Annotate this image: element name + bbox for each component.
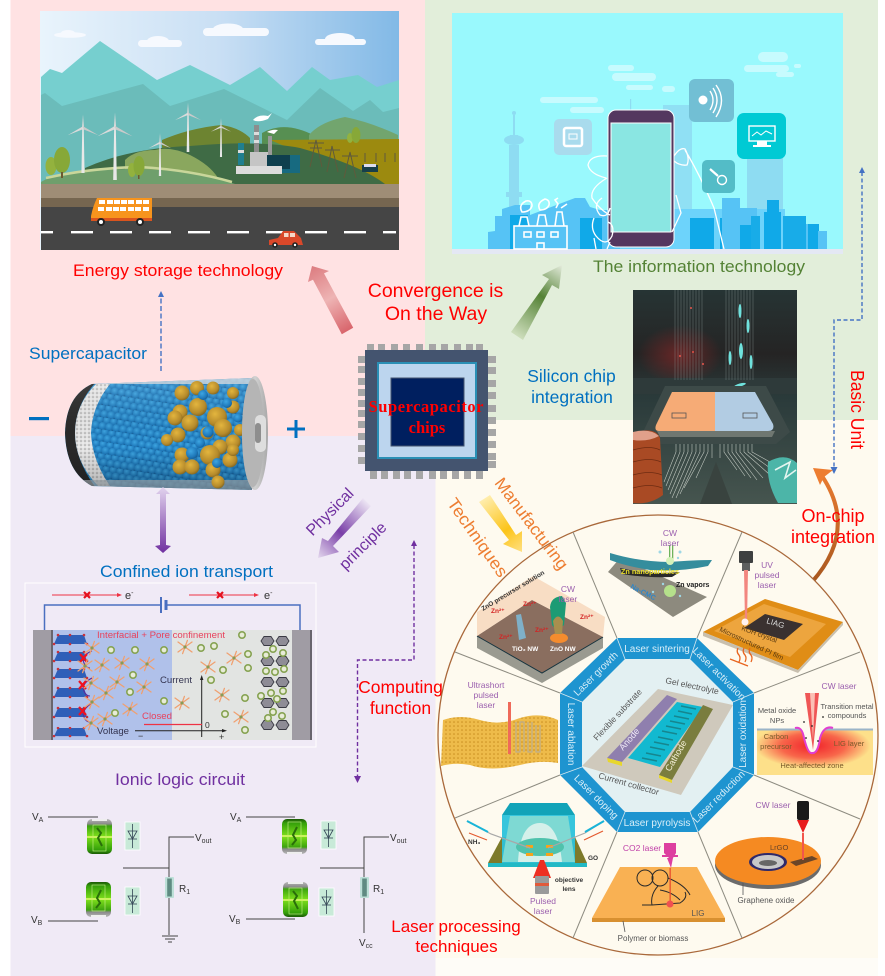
scene: laser activation: laser: [758, 580, 776, 590]
circuit: left logic gate: A: [39, 817, 44, 824]
circuit: right logic gate: B: [236, 919, 241, 926]
electron flow blocked: [52, 590, 273, 602]
icon: monitor: [737, 113, 786, 159]
scene: laser activation: [703, 551, 843, 673]
chip body: [643, 386, 790, 444]
label: manufacturing: Manufacturing: [491, 474, 572, 573]
scene: laser sintering: Na-CMC: [629, 584, 657, 602]
trees: [46, 127, 360, 179]
heading: ionic logic circuit: Ionic logic circuit: [115, 770, 245, 789]
label: silicon chip integration: integration: [531, 387, 613, 407]
scene: laser doping: objective: [555, 877, 583, 884]
icon: plus terminal: [287, 420, 305, 438]
heading: energy storage technology: Energy storage technology: [73, 261, 284, 280]
scene: laser doping: [467, 803, 604, 916]
circuit: right logic gate: A: [237, 817, 242, 824]
octagon ring of laser techniques: Laser oxidation: [738, 700, 749, 768]
scene: laser oxidation: compounds: [828, 711, 867, 720]
scene: laser sintering: [608, 528, 712, 617]
scene: laser reduction: CW laser: [756, 800, 791, 810]
scene: laser growth: TiO₂ NW: [512, 646, 539, 653]
octagon ring of laser techniques: Laser pyrolysis: [624, 818, 690, 829]
scene: laser growth: Zn²⁺: [491, 608, 505, 615]
scene: laser doping: NH₃: [468, 839, 480, 846]
circuit: right logic gate: 1: [380, 889, 384, 896]
circuit: left logic gate: B: [38, 920, 43, 927]
panel: silicon chip photo: [633, 290, 797, 504]
scene: laser oxidation: Heat-affected zone: [780, 761, 844, 770]
icon: chip: [554, 119, 592, 155]
car: [269, 231, 303, 248]
heading: laser processing techniques: techniques: [415, 937, 498, 956]
icon: magnifier: [702, 160, 735, 193]
central flexible device: [582, 675, 733, 797]
label: on-chip integration: integration: [791, 527, 875, 547]
scene: laser ablation: laser: [477, 700, 495, 710]
central flexible device: Current collector: [597, 770, 660, 797]
teal cylinder: [768, 457, 797, 503]
electron flow blocked: e: [264, 590, 270, 602]
current-voltage plot: Closed: [142, 711, 172, 722]
scene: laser pyrolysis: Polymer or biomass: [618, 934, 688, 943]
scene: laser ablation: pulsed: [473, 690, 499, 700]
scene: laser oxidation: Transition metal: [820, 702, 874, 711]
scene: laser oxidation: [757, 681, 874, 775]
label: silicon chip integration: Silicon chip: [527, 366, 616, 386]
arrow: manufacturing techniques: [479, 495, 522, 552]
scene: laser sintering: CW: [663, 528, 677, 538]
circuit: left logic gate: [31, 812, 211, 942]
circuit: right logic gate: V: [229, 914, 236, 925]
circuit: left logic gate: out: [202, 838, 211, 845]
label: computing function: function: [370, 698, 431, 718]
central flexible device: Anode: [617, 726, 642, 752]
red cylinder: [633, 430, 663, 503]
scene: laser activation: LIAG: [765, 616, 785, 630]
carbon electrode: [258, 636, 289, 730]
hand outline: [588, 149, 724, 249]
scene: laser oxidation: LIG layer: [834, 739, 865, 748]
circuit: right logic gate: cc: [366, 943, 373, 950]
circuit: right logic gate: out: [397, 838, 406, 845]
scene: laser growth: ZnO NW: [550, 646, 576, 653]
scene: laser doping: Pulsed: [530, 896, 556, 906]
scene: laser activation: Microstructured PI film: [718, 626, 784, 662]
layered electrode: [53, 634, 92, 737]
scene: laser growth: Zn²⁺: [523, 601, 537, 608]
scene: laser doping: GO: [588, 855, 598, 862]
current-voltage plot: Current: [160, 675, 192, 686]
arrow: to information technology: [511, 265, 562, 340]
clouds: [540, 52, 801, 113]
chip pins: [358, 344, 496, 479]
heading: interfacial plus pore confinement: Interfacial + Pore confinement: [97, 630, 226, 640]
scene: laser activation: KOH crystal: [740, 625, 778, 645]
scene: laser ablation: [441, 680, 558, 768]
current-voltage plot: 0: [205, 720, 210, 730]
octagon ring of laser techniques: Laser ablation: [565, 703, 576, 765]
arrow: to energy storage: [308, 266, 353, 334]
scene: laser pyrolysis: LIG: [692, 909, 704, 918]
city buildings: [488, 198, 827, 249]
heading: convergence is on the way: Convergence is: [368, 280, 503, 302]
supercapacitor cell illustration: [60, 375, 268, 495]
label: computing function: Computing: [358, 677, 443, 697]
panel: laser processing wheel: [438, 515, 878, 955]
octagon ring of laser techniques: Laser activation: [690, 646, 747, 703]
central flexible device: Flexible substrate: [591, 687, 644, 742]
scene: laser reduction: [715, 800, 821, 905]
central flexible device: Gel electrolyte: [665, 675, 720, 696]
electron flow blocked: e: [125, 590, 131, 602]
arrow: battery to ion transport: [155, 487, 171, 553]
scene: laser growth: Zn²⁺: [499, 634, 513, 641]
chip label: chips: [409, 418, 446, 437]
octagon ring of laser techniques: Laser doping: [571, 773, 620, 822]
heading: the information technology: The information technology: [593, 257, 806, 276]
scene: laser growth: [477, 569, 605, 683]
circuit: left logic gate: V: [195, 833, 202, 844]
scene: laser oxidation: precursor: [760, 742, 792, 751]
label: basic unit: Basic Unit: [847, 370, 867, 449]
panel: confined ion transport diagram: [25, 583, 316, 747]
lower traces: [700, 462, 732, 504]
scene: laser growth: Zn²⁺: [580, 614, 594, 621]
clouds: [54, 24, 366, 47]
label: supercapacitor: Supercapacitor: [29, 344, 147, 363]
scene: laser sintering: Zn nanoparticles: [621, 569, 679, 576]
chip label: Supercapacitor: [368, 397, 484, 416]
arrow: computing function connector: [354, 540, 417, 783]
heading: convergence is on the way: On the Way: [385, 303, 487, 325]
octagon ring of laser techniques: Laser sintering: [624, 644, 690, 655]
circuit: left logic gate: 1: [186, 889, 190, 896]
vertical traces: [675, 290, 753, 380]
label: principle: principle: [336, 519, 390, 573]
scene: laser oxidation: Carbon: [764, 732, 788, 741]
octagon ring of laser techniques: Laser reduction: [691, 769, 748, 826]
arrow: basic unit dashed connector: [830, 167, 865, 474]
scene: laser oxidation: CW laser: [822, 681, 857, 691]
scene: laser oxidation: Metal oxide: [758, 706, 796, 715]
current-voltage plot: Voltage: [97, 726, 129, 737]
scene: laser growth: Zn²⁺: [535, 627, 549, 634]
electron flow blocked: -: [270, 590, 273, 597]
scene: laser pyrolysis: CO2 laser: [623, 843, 661, 853]
scene: laser growth: laser: [559, 594, 577, 604]
scene: laser activation: UV: [761, 560, 773, 570]
label: physical: Physical: [303, 485, 357, 539]
smartphone: [608, 110, 674, 247]
panel: energy storage landscape: [40, 11, 399, 250]
scene: laser ablation: Ultrashort: [468, 680, 505, 690]
current-voltage plot: [97, 675, 227, 742]
factory outline: [514, 198, 567, 249]
supercapacitor chip: [358, 344, 496, 479]
icon: minus terminal: [29, 417, 49, 420]
wheel spokes: [455, 532, 860, 938]
circuit: right logic gate: V: [230, 812, 237, 823]
electron flow blocked: -: [131, 590, 134, 597]
road dashes: [41, 231, 396, 233]
octagon ring of laser techniques: Laser growth: [572, 650, 621, 699]
heading: laser processing techniques: Laser processing: [391, 917, 521, 936]
octagon ring of laser techniques: [560, 638, 754, 832]
wind turbines: [68, 103, 231, 180]
label: techniques: Techniques: [443, 495, 512, 581]
arrow: physical principle: [318, 498, 371, 558]
icon: wifi signal: [689, 79, 734, 122]
circuit: right logic gate: [229, 812, 406, 950]
solvated ions: [78, 632, 251, 733]
scene: laser activation: pulsed: [754, 570, 780, 580]
scene: laser growth: ZnO precursor solution: [480, 569, 546, 613]
scene: laser reduction: Graphene oxide: [738, 896, 795, 905]
pylons: [308, 140, 395, 178]
circuit: right logic gate: V: [390, 833, 397, 844]
scene: laser pyrolysis: [592, 843, 725, 943]
scene: laser reduction: LrGO: [770, 843, 789, 852]
external circuit: [44, 597, 300, 630]
circuit: right logic gate: V: [359, 938, 366, 949]
circuit: left logic gate: V: [31, 915, 38, 926]
wheel circle: [438, 515, 878, 955]
scene: laser sintering: laser: [661, 538, 679, 548]
skyline background: [504, 99, 783, 215]
arrow: on-chip integration curve: [812, 468, 838, 582]
label: on-chip integration: On-chip: [801, 506, 865, 526]
scene: laser oxidation: NPs: [770, 716, 784, 725]
central flexible device: Cathode: [663, 739, 689, 773]
circuit: right logic gate: R: [373, 884, 380, 895]
panel: information technology scene: [452, 13, 843, 254]
bus: [91, 198, 152, 226]
scene: laser sintering: Zn vapors: [676, 582, 710, 589]
current-voltage plot: −: [138, 731, 143, 741]
power plant: [236, 113, 378, 174]
scene: laser doping: laser: [534, 906, 552, 916]
scene: laser growth: CW: [561, 584, 575, 594]
circuit: left logic gate: R: [179, 884, 186, 895]
current-voltage plot: +: [219, 732, 224, 742]
label: confined ion transport: Confined ion transport: [100, 562, 273, 581]
scene: laser doping: lens: [562, 886, 576, 893]
arrow: supercapacitor to energy storage: [158, 291, 164, 371]
circuit: left logic gate: V: [32, 812, 39, 823]
